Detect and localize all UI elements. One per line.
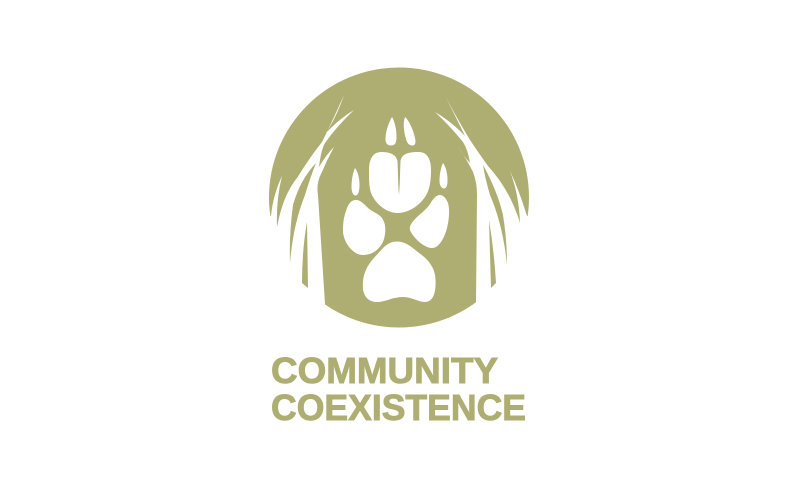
centre toe pad bbox=[369, 152, 431, 213]
wordmark line 2: COEXISTENCE bbox=[271, 387, 526, 428]
wordmark bbox=[271, 350, 526, 428]
left centre claw bbox=[386, 117, 396, 146]
left grass strips bbox=[290, 163, 316, 288]
badge circle bbox=[269, 68, 529, 328]
left grass blades bbox=[255, 95, 354, 335]
left toe pad bbox=[343, 200, 385, 255]
wordmark line 1: COMMUNITY bbox=[271, 350, 498, 391]
right centre claw bbox=[404, 117, 415, 146]
right side claw bbox=[440, 163, 448, 188]
emblem bbox=[255, 68, 545, 335]
left side claw bbox=[352, 168, 360, 196]
main pad bbox=[363, 242, 436, 302]
paw print bbox=[343, 117, 449, 302]
right toe pad bbox=[410, 195, 449, 248]
right grass blades bbox=[435, 96, 545, 335]
right grass strips bbox=[483, 165, 507, 288]
